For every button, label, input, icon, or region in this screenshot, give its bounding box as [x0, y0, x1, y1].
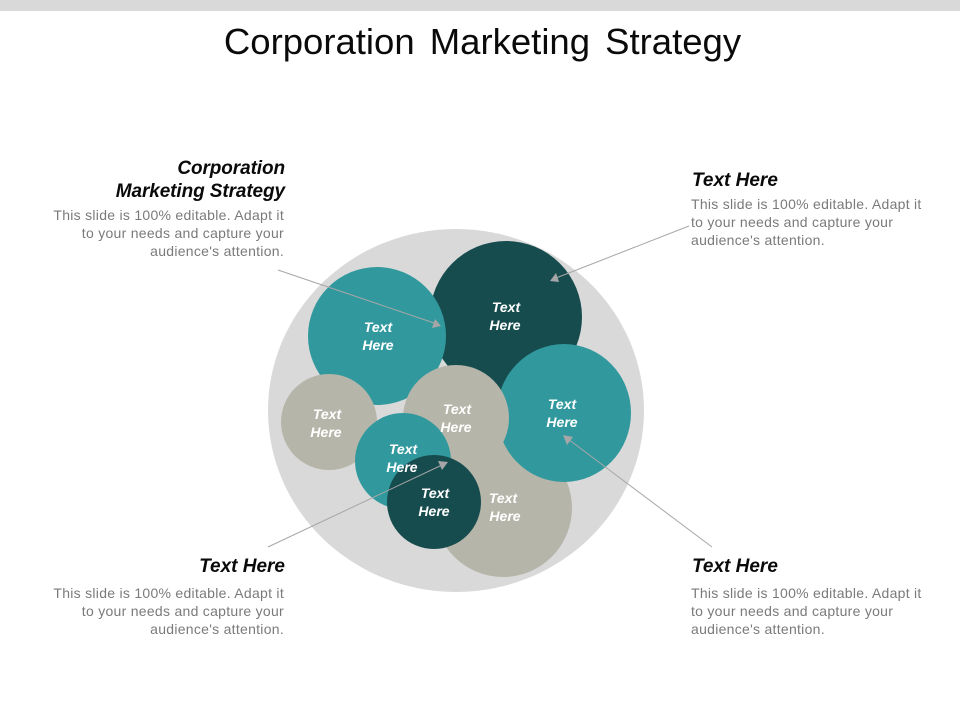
heading: Text Here: [692, 170, 778, 191]
label: teal upper left: Text: [364, 319, 393, 335]
text block: [53, 207, 284, 259]
callout: bottom right: [691, 556, 922, 637]
label: teal small: Here: [386, 459, 418, 475]
label: teal small: [386, 441, 418, 475]
label: dark large: Here: [489, 317, 521, 333]
heading: Text Here: [199, 556, 285, 577]
label: teal small: Text: [389, 441, 418, 457]
bubble: beige middle: [403, 365, 509, 471]
bubble: beige left: [281, 374, 377, 470]
title: Corporation Marketing Strategy: [224, 21, 741, 62]
label: beige left: [310, 406, 342, 440]
bubble: dark large: [430, 241, 582, 393]
background circle: [268, 229, 644, 592]
label: beige large: [489, 490, 521, 524]
text block: audience's attention.: [150, 621, 284, 637]
callout: top left: [53, 158, 286, 259]
label: teal right: Here: [546, 414, 578, 430]
label: teal upper left: Here: [362, 337, 394, 353]
bubble: teal upper left: [308, 267, 446, 405]
heading: Text Here: [692, 556, 778, 577]
label: dark large: [489, 299, 521, 333]
bubble: teal right: [497, 344, 631, 482]
text block: This slide is 100% editable. Adapt it: [53, 207, 284, 223]
label: beige middle: Here: [440, 419, 472, 435]
label: dark small: Text: [421, 485, 450, 501]
label: dark small: [418, 485, 450, 519]
label: teal right: Text: [548, 396, 577, 412]
arrow: top left: [278, 270, 441, 328]
text block: [691, 196, 922, 248]
label: teal right: [546, 396, 578, 430]
label: teal upper left: [362, 319, 394, 353]
text block: audience's attention.: [691, 232, 825, 248]
label: beige large: Here: [489, 508, 521, 524]
text block: This slide is 100% editable. Adapt it: [691, 585, 922, 601]
label: dark small: Here: [418, 503, 450, 519]
bubble: beige large: [434, 439, 572, 577]
heading: corporation marketing strategy: [116, 158, 286, 202]
arrow: bottom right: [563, 435, 712, 547]
text block: This slide is 100% editable. Adapt it: [53, 585, 284, 601]
text block: audience's attention.: [150, 243, 284, 259]
heading: corporation marketing strategy: Marketing Strategy: [116, 181, 285, 202]
text block: [691, 585, 922, 637]
text block: to your needs and capture your: [82, 603, 284, 619]
label: beige left: Text: [313, 406, 342, 422]
label: beige large: Text: [489, 490, 518, 506]
bubble: teal small: [355, 413, 451, 509]
arrow: top right: [550, 226, 689, 282]
label: beige middle: [440, 401, 472, 435]
text block: This slide is 100% editable. Adapt it: [691, 196, 922, 212]
label: dark large: Text: [492, 299, 521, 315]
text block: to your needs and capture your: [691, 214, 893, 230]
text block: [53, 585, 284, 637]
text block: to your needs and capture your: [691, 603, 893, 619]
label: beige left: Here: [310, 424, 342, 440]
text block: audience's attention.: [691, 621, 825, 637]
bubble: dark small: [387, 455, 481, 549]
callout: bottom left: [53, 556, 285, 637]
heading: corporation marketing strategy: Corporation: [177, 158, 285, 179]
top bar: [0, 0, 960, 11]
label: beige middle: Text: [443, 401, 472, 417]
callout: top right: [691, 170, 922, 248]
arrow: bottom left: [268, 461, 448, 547]
text block: to your needs and capture your: [82, 225, 284, 241]
